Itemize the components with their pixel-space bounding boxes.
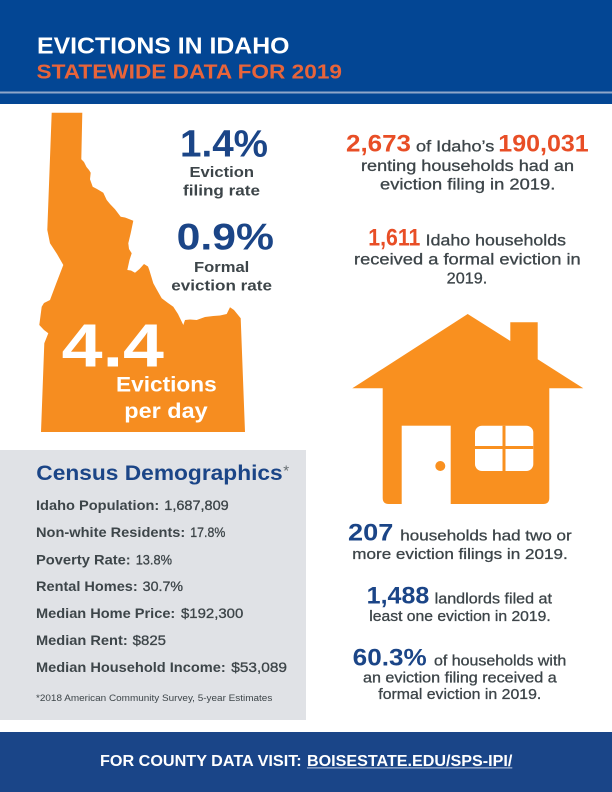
callout: repeat filings: 207: [348, 520, 393, 547]
callout: share receiving formal eviction: formal eviction in 2019.: [378, 687, 541, 703]
callout: repeat filings: [348, 520, 572, 563]
row: poverty rate: 13.8%: [136, 551, 172, 567]
heading asterisk: *: [283, 462, 289, 480]
row: population: Idaho Population:: [36, 497, 159, 513]
panel heading: Census Demographics: [36, 461, 283, 485]
row: median rent: Median Rent:: [36, 632, 128, 648]
callout: renting households with filing: [346, 131, 589, 193]
row: median rent: [36, 632, 166, 648]
callout: renting households with filing: eviction filing in 2019.: [380, 176, 555, 193]
callout: renting households with filing: 190,031: [498, 131, 589, 158]
stat: evictions per day: per day: [124, 400, 208, 423]
row: rental homes: [36, 578, 183, 594]
row: rental homes: 30.7%: [143, 578, 183, 594]
stat: evictions per day: [62, 312, 217, 423]
icon: Idaho state map: [39, 113, 245, 432]
stat: eviction filing rate: Eviction: [190, 164, 254, 181]
row: median rent: $825: [133, 632, 166, 648]
callout: share receiving formal eviction: [353, 645, 566, 703]
stat: formal eviction rate: eviction rate: [171, 278, 272, 295]
stat: formal eviction rate: Formal: [194, 259, 249, 276]
header banner: [0, 0, 612, 104]
callout: renting households with filing: renting households had an: [361, 158, 574, 175]
row: non-white residents: Non-white Residents:: [36, 524, 185, 540]
stat: eviction filing rate: [180, 124, 268, 199]
callout: landlords: landlords filed at: [435, 591, 552, 607]
row: median home price: $192,300: [181, 605, 244, 621]
row: non-white residents: 17.8%: [190, 524, 225, 540]
callout: renting households with filing: 2,673: [346, 131, 411, 158]
callout: formal evictions: 2019.: [447, 270, 487, 287]
stat: formal eviction rate: 0.9%: [177, 216, 274, 257]
stat: eviction filing rate: filing rate: [183, 182, 260, 199]
row: median household income: $53,089: [231, 659, 287, 675]
callout: formal evictions: 1,611: [368, 225, 420, 252]
callout: formal evictions: Idaho households: [426, 233, 566, 250]
callout: formal evictions: [354, 225, 581, 287]
footer banner: [0, 732, 612, 792]
door: [402, 426, 451, 504]
row: poverty rate: [36, 551, 172, 567]
row: rental homes: Rental Homes:: [36, 578, 138, 594]
row: population: 1,687,809: [164, 497, 229, 513]
door knob: [435, 461, 445, 471]
callout: repeat filings: more eviction filings in 2019.: [352, 547, 568, 563]
row: median home price: Median Home Price:: [36, 605, 175, 621]
stat: eviction filing rate: 1.4%: [180, 124, 268, 166]
panel: census demographics: [0, 450, 306, 720]
stat: formal eviction rate: [171, 216, 274, 295]
callout: share receiving formal eviction: an eviction filing received a: [363, 671, 558, 687]
row: poverty rate: Poverty Rate:: [36, 551, 131, 567]
footnote: *2018 American Community Survey, 5-year Estimates: [36, 693, 273, 703]
callout: landlords: [367, 582, 552, 625]
window: [475, 426, 533, 471]
callout: landlords: least one eviction in 2019.: [369, 609, 551, 625]
subtitle: STATEWIDE DATA FOR 2019: [36, 61, 342, 84]
stat: evictions per day: Evictions: [116, 374, 217, 397]
footer link: BOISESTATE.EDU/SPS-IPI/: [307, 753, 513, 770]
callout: formal evictions: received a formal eviction in: [354, 251, 581, 268]
stat: evictions per day: 4.4: [62, 312, 164, 380]
callout: share receiving formal eviction: of households with: [434, 654, 566, 670]
icon: house: [352, 314, 583, 504]
callout: renting households with filing: of Idaho’s: [416, 139, 495, 156]
callout: share receiving formal eviction: 60.3%: [353, 645, 427, 672]
row: median home price: [36, 605, 244, 621]
footer label: FOR COUNTY DATA VISIT:: [100, 753, 302, 770]
title: EVICTIONS IN IDAHO: [37, 32, 290, 58]
callout: repeat filings: households had two or: [400, 529, 572, 545]
row: median household income: Median Household Income:: [36, 659, 226, 675]
callout: landlords: 1,488: [367, 582, 429, 609]
row: population: [36, 497, 229, 513]
